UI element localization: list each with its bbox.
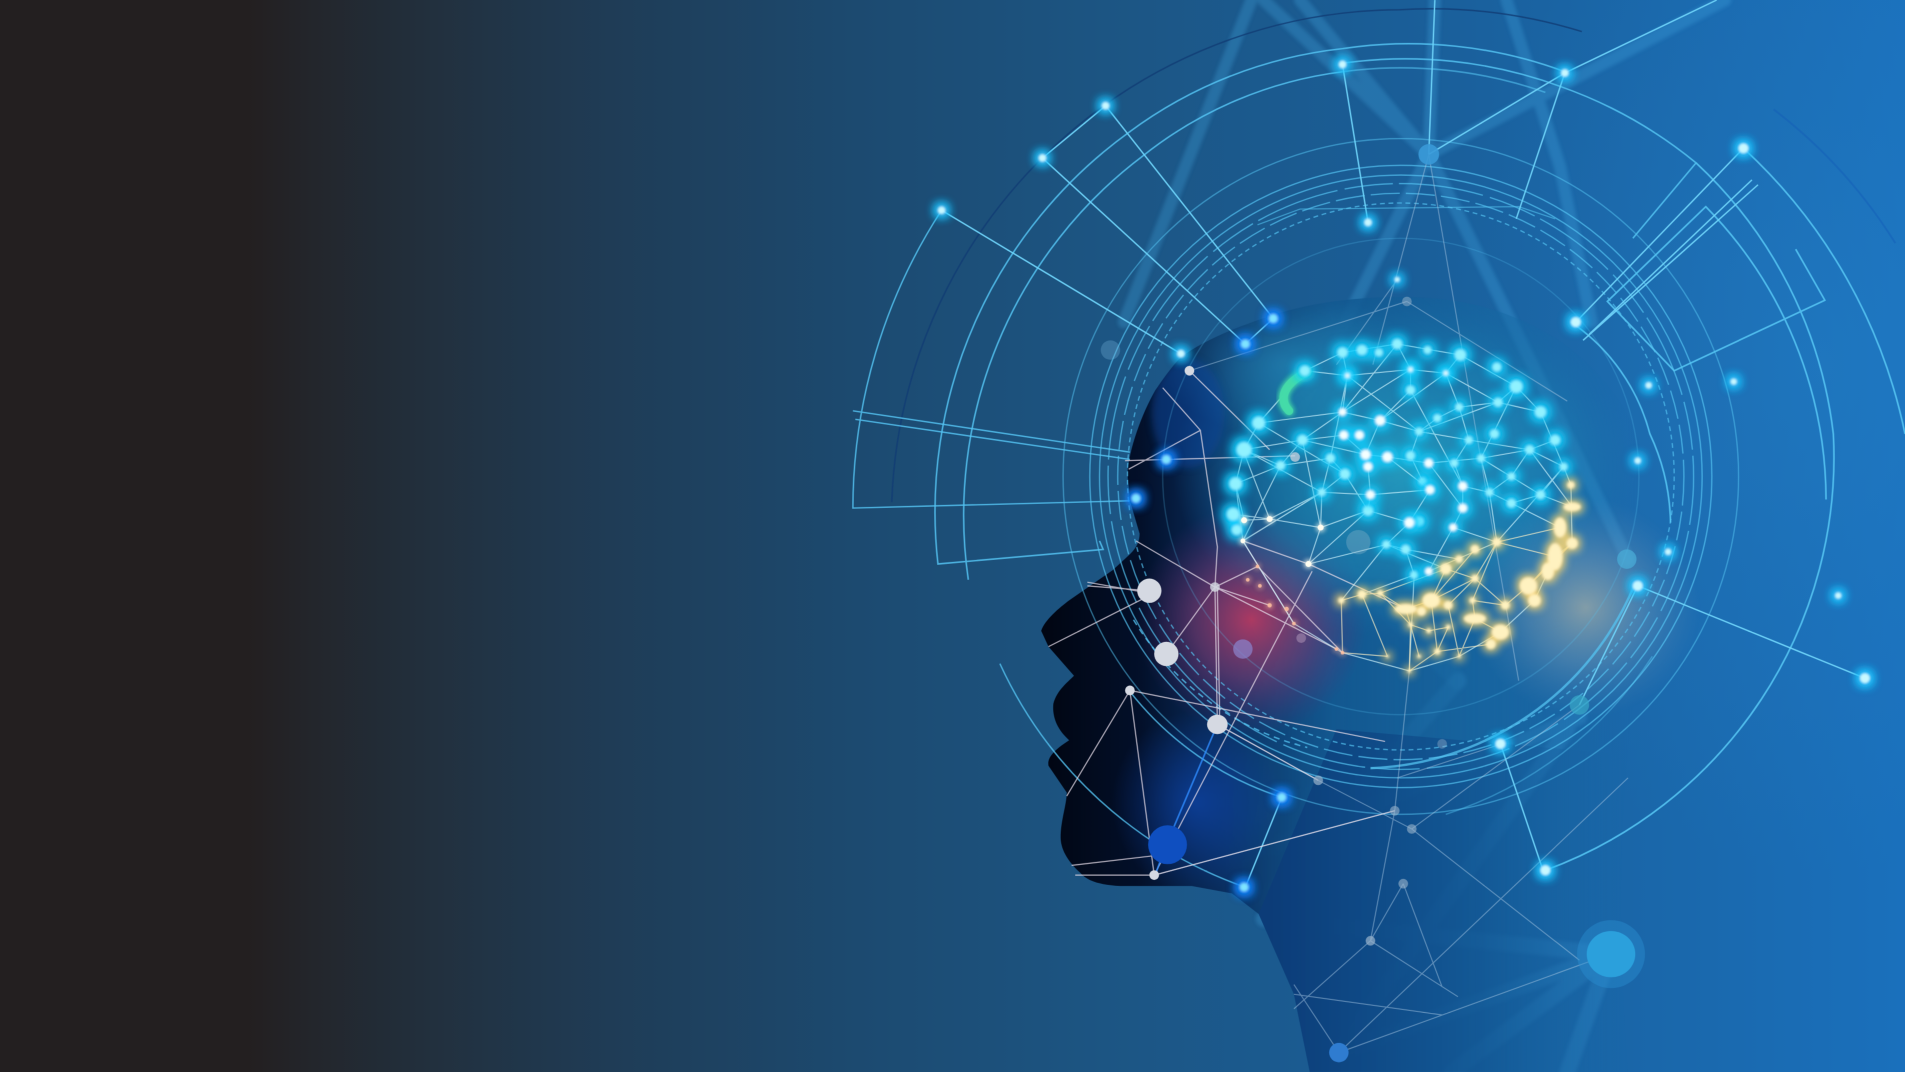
translucent dim nodes <box>1101 144 1637 946</box>
warm glow behind brain <box>1470 498 1701 717</box>
faint lower neck network <box>1154 154 1628 1053</box>
second and third rings <box>935 44 1696 580</box>
blue jaw node <box>1148 825 1187 864</box>
dark navy outer arc <box>892 9 1582 502</box>
lower bright ring segment <box>1370 586 1634 768</box>
brain nodes: green cluster <box>1284 372 1307 411</box>
head silhouette <box>1041 297 1652 1072</box>
neck base node <box>1329 1043 1349 1062</box>
corner light <box>1434 0 1905 875</box>
brain nodes: yellow <box>1338 481 1581 673</box>
network connector lines <box>942 0 1865 887</box>
face network lines <box>1048 371 1406 875</box>
deep blue glowing nodes <box>1132 314 1286 892</box>
lower white sparkle nodes <box>1240 516 1324 567</box>
left wedge <box>853 210 1130 508</box>
brain nodes: red <box>1246 565 1344 655</box>
concentric tech rings <box>853 9 1905 887</box>
right arcs <box>1545 109 1905 870</box>
large cyan node with halo <box>1577 920 1645 988</box>
lower face arcs <box>1000 620 1652 887</box>
top ring detail <box>1257 207 1555 225</box>
brain nodes: cyan <box>1227 339 1567 579</box>
brain nodes: white cores <box>1339 368 1467 575</box>
blue link from jaw to lip <box>1154 724 1217 878</box>
white face nodes <box>1125 366 1300 880</box>
outer glowing cyan nodes <box>938 61 1870 875</box>
translucent beams <box>1124 0 1725 1072</box>
head inner glows <box>1120 307 1582 1072</box>
inner ring bundle <box>1063 139 1739 814</box>
brain wire mesh <box>1233 344 1572 671</box>
